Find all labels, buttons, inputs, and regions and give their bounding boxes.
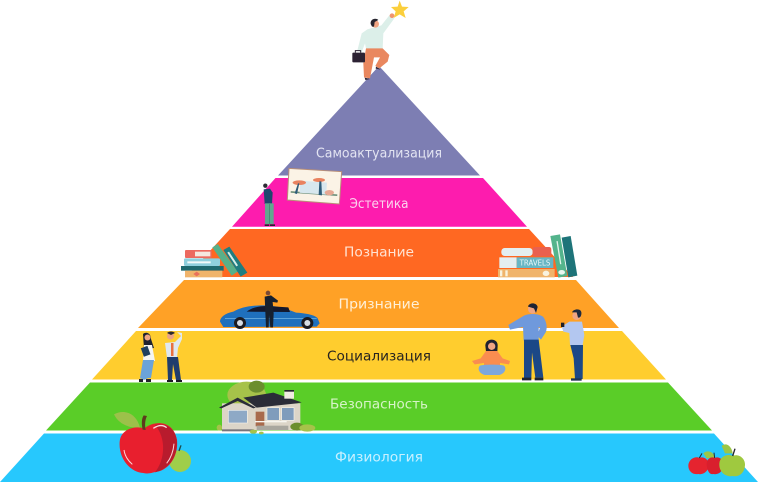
tier: socialization <box>92 331 666 380</box>
illustration: small apples at right <box>688 444 745 476</box>
label: physiology: Физиология <box>335 450 423 466</box>
illustration: left stack of books <box>181 244 247 277</box>
label: recognition: Признание <box>338 298 420 312</box>
tier: cognition <box>186 229 573 277</box>
illustration: man viewing painting <box>263 168 342 226</box>
illustration: right stack of books: TRAVELS <box>519 259 550 268</box>
tier: physiology <box>0 434 758 482</box>
tier: aesthetics <box>232 178 527 227</box>
illustration: blue car with man <box>220 291 320 329</box>
label: self-actualization: Самоактуализация <box>316 146 442 162</box>
illustration: large red apple with green apple <box>114 412 191 473</box>
label: socialization: Социализация <box>327 350 431 364</box>
tier: safety <box>46 382 712 430</box>
illustration: climber reaching for star <box>352 1 409 80</box>
label: safety: Безопасность <box>330 398 428 412</box>
tier: self-actualization <box>278 66 480 176</box>
tier: recognition <box>138 280 619 328</box>
illustration: right stack of books <box>498 234 577 278</box>
label: cognition: Познание <box>344 246 414 260</box>
label: aesthetics: Эстетика <box>350 197 408 212</box>
illustration: two people at left of socialization tier <box>139 332 182 382</box>
illustration: meditating woman and two standing people <box>472 303 584 381</box>
illustration: house with bushes <box>217 381 315 434</box>
